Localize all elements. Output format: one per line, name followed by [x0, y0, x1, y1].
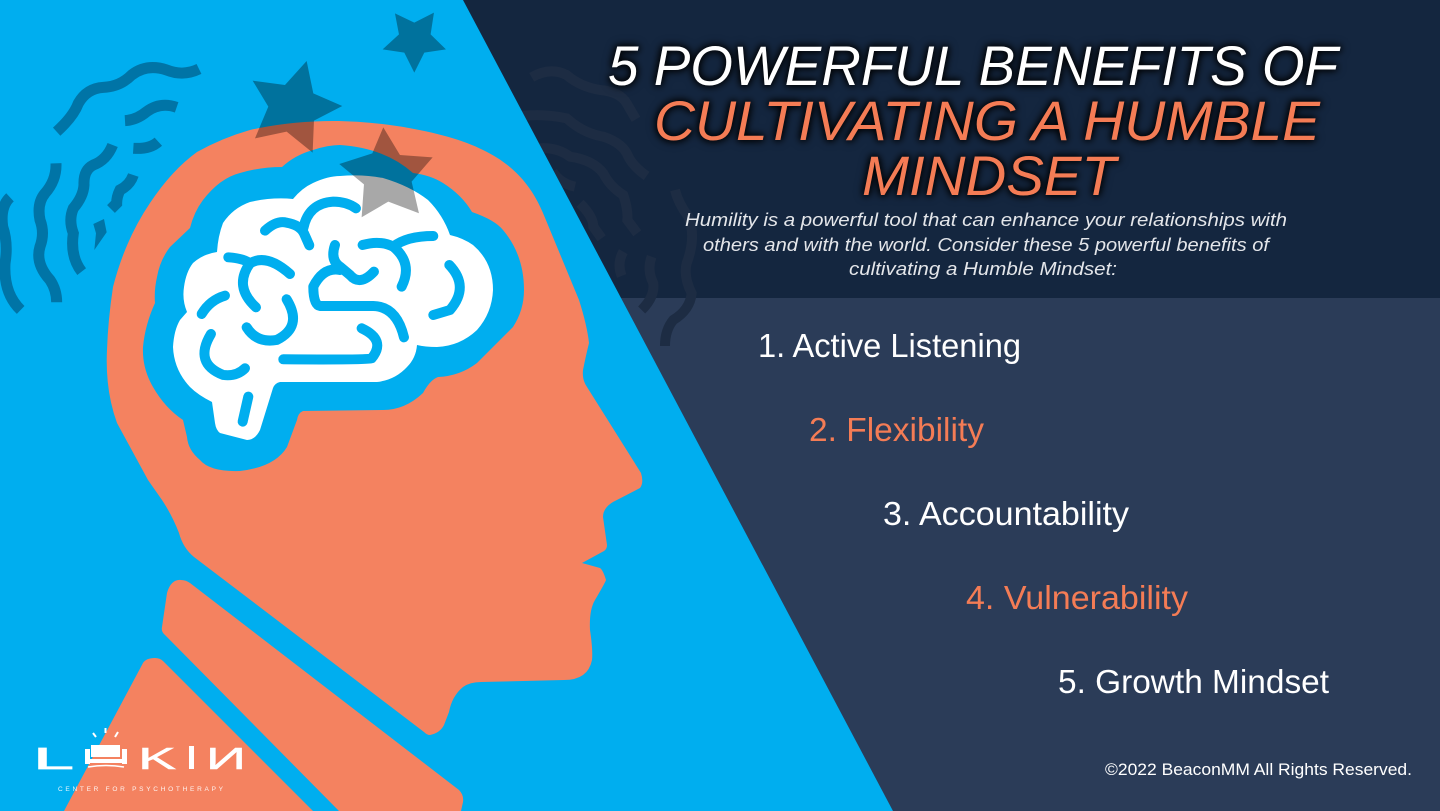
title: CULTIVATING A HUMBLE: [654, 89, 1321, 152]
head silhouette: [107, 121, 642, 735]
logo: Lokin Center for Psychotherapy: L: [33, 741, 74, 776]
intro paragraph: Humility is a powerful tool that can enhance your relationships with: [685, 209, 1287, 230]
logo: Lokin Center for Psychotherapy: CENTER FOR PSYCHOTHERAPY: [58, 786, 224, 793]
panel: dark header background: [0, 0, 1440, 298]
copyright: ©2022 BeaconMM All Rights Reserved.: [1105, 760, 1412, 779]
intro paragraph: [685, 209, 1287, 279]
benefits list: 5. Growth Mindset: [1058, 663, 1329, 700]
benefits list: 4. Vulnerability: [966, 579, 1189, 616]
title: [608, 34, 1341, 207]
logo: Lokin Center for Psychotherapy: K: [138, 741, 177, 776]
title: MINDSET: [862, 144, 1120, 207]
intro paragraph: others and with the world. Consider these 5 powerful benefits of: [703, 234, 1271, 255]
benefits list: 3. Accountability: [883, 495, 1130, 532]
decorative waves: left side: [2, 68, 199, 310]
brain grooves: [202, 202, 460, 422]
panel: list background: [0, 298, 1440, 811]
logo: Lokin Center for Psychotherapy: N: [206, 741, 246, 776]
benefits list: 2. Flexibility: [809, 411, 984, 448]
intro paragraph: cultivating a Humble Mindset:: [849, 258, 1117, 279]
icon: stars: [253, 13, 446, 217]
icon: white brain: [173, 175, 493, 440]
panel: blue diagonal background: [0, 0, 893, 811]
brain halo: [143, 145, 524, 471]
title: 5 POWERFUL BENEFITS OF: [608, 34, 1341, 97]
logo: Lokin Center for Psychotherapy: [33, 728, 246, 793]
benefits list: [758, 327, 1329, 700]
shoulder: [64, 658, 313, 811]
benefits list: 1. Active Listening: [758, 327, 1021, 364]
decorative waves: right side: [522, 71, 692, 346]
collar: [162, 580, 463, 811]
